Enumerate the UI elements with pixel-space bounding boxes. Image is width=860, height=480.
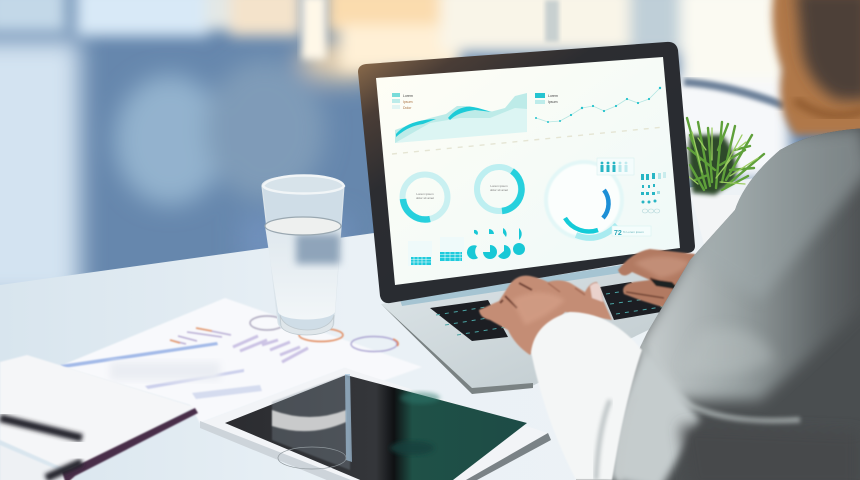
dashboard: percentage callout: % Lorem ipsum (623, 230, 644, 234)
water glass on desk (262, 176, 344, 335)
dashboard: donut one: Lorem ipsum (416, 192, 434, 196)
document papers with charts (60, 298, 422, 423)
dashboard: donut one (402, 174, 448, 220)
person: sweater back (560, 120, 860, 480)
dashboard: area chart legend: Ipsum (548, 100, 558, 104)
dashboard: donut two (477, 167, 522, 211)
dashboard: line chart (535, 87, 661, 123)
laptop (358, 42, 695, 394)
dashboard: small icon matrix (641, 172, 666, 213)
dashboard: area chart (395, 93, 527, 143)
dashboard: area chart legend: Dolor (403, 106, 412, 110)
dashboard: donut two: Lorem ipsum (490, 184, 508, 188)
dashboard: area chart legend: Lorem (548, 94, 558, 98)
hair (772, 0, 860, 135)
hand: left (479, 276, 612, 355)
laptop bezel (358, 42, 695, 303)
dashboard: people icons (597, 158, 634, 175)
circle charts on paper (250, 316, 398, 352)
dashboard: area chart legend (392, 93, 558, 110)
laptop deck and keyboard (381, 254, 695, 394)
dashboard: axis (392, 127, 664, 154)
tablet on desk (200, 368, 551, 480)
desk surface (0, 160, 860, 480)
dashboard: pie chart icons (467, 228, 525, 259)
plant in white pot (687, 118, 764, 258)
small bars on paper (170, 328, 308, 362)
dashboard: waffle charts (408, 237, 464, 266)
dashboard: area chart legend: Ipsum (403, 100, 413, 104)
notebook with pen (0, 355, 198, 480)
laptop screen (376, 57, 680, 285)
person: white sleeve (531, 312, 642, 480)
hand: right (618, 249, 695, 310)
dashboard: large gauge (546, 162, 622, 238)
dashboard: percentage callout (612, 226, 651, 237)
dashboard: area chart legend: Lorem (403, 94, 413, 98)
dashboard: donut one: dolor sit amet (416, 196, 434, 200)
dashboard: donut two: dolor sit amet (490, 188, 508, 192)
dashboard: percentage callout: 72 (614, 230, 622, 237)
